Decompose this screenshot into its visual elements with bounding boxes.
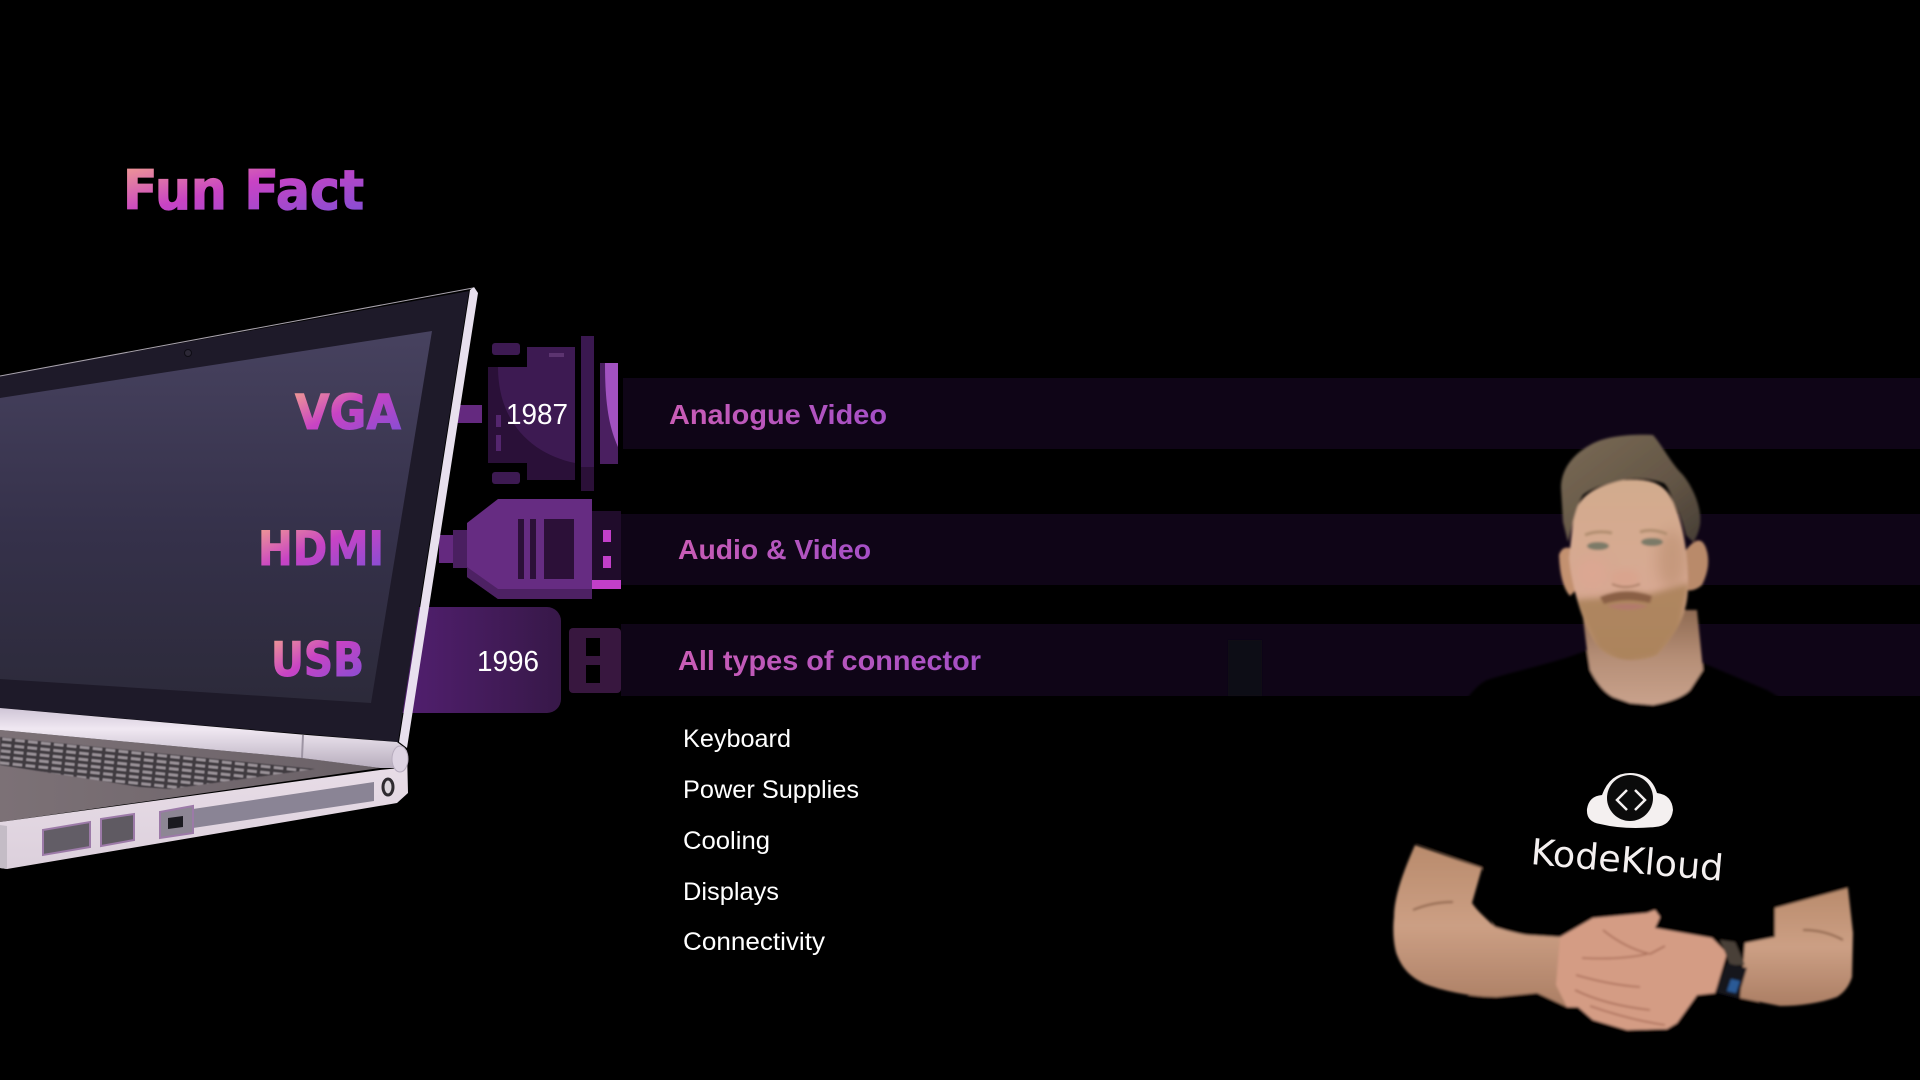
laptop	[0, 287, 478, 869]
icon: HDMI connector	[439, 499, 621, 599]
screen label: USB: USB	[271, 633, 364, 688]
band artefact	[1228, 640, 1262, 696]
heading: Audio and Video: Audio & Video	[678, 534, 871, 565]
screen label: VGA: VGA	[295, 385, 401, 441]
shirt logo: cloud	[1587, 773, 1673, 828]
list: USB uses: Displays	[683, 878, 779, 906]
year label: 1987: 1987	[506, 399, 568, 431]
icon: USB connector	[400, 607, 621, 713]
list: USB uses: Cooling	[683, 827, 770, 855]
heading: All types of connector: All types of connector	[678, 645, 981, 676]
list: USB uses	[683, 725, 859, 956]
icon: VGA connector	[455, 336, 618, 491]
heading: Analogue Video: Analogue Video	[669, 399, 887, 430]
screen label: HDMI: HDMI	[258, 522, 384, 577]
band: USB row	[621, 624, 1920, 696]
list: USB uses: Power Supplies	[683, 776, 859, 804]
band: HDMI row	[621, 514, 1920, 585]
list: USB uses: Keyboard	[683, 725, 791, 753]
list: USB uses: Connectivity	[683, 928, 826, 956]
band: VGA row	[623, 378, 1920, 449]
presenter photo	[1393, 435, 1853, 1080]
shirt logo: KodeKloud: KodeKloud	[1529, 832, 1725, 890]
year label: 1996: 1996	[477, 646, 539, 678]
title: Fun Fact	[123, 159, 364, 222]
